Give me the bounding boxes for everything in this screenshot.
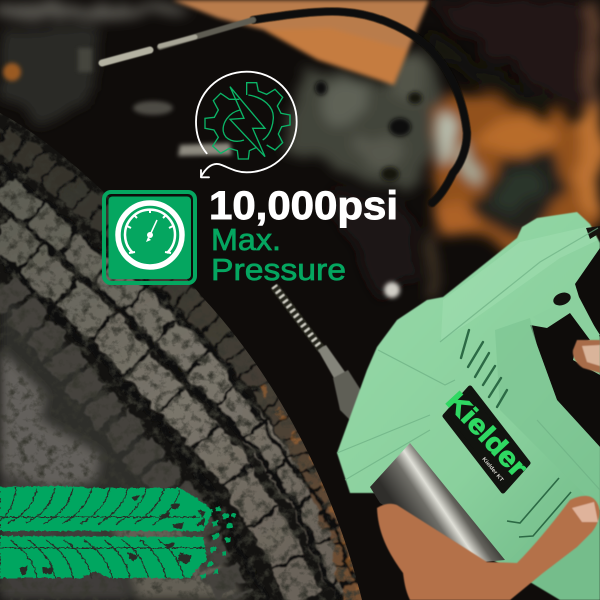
white paint patches (437, 118, 455, 162)
tyre (0, 100, 380, 600)
subheading: Max. Pressure: Pressure (211, 252, 346, 287)
speech circle with arrow (196, 72, 297, 177)
dark beam behind cable (421, 27, 555, 125)
dark gap above trigger (575, 248, 600, 337)
brand label: Kielder KT (480, 456, 505, 484)
pressure badge (104, 192, 195, 283)
body creases (337, 228, 600, 490)
subheading: Max. Pressure: Max. (211, 222, 281, 257)
lower grooves (507, 478, 571, 537)
tyre track graphic (0, 486, 236, 579)
canister (370, 443, 505, 562)
tread ribs (0, 100, 380, 600)
icon: gear and lightning bolt in speech circle (196, 72, 297, 177)
hands (377, 340, 600, 600)
hose spring and fitting (274, 286, 362, 420)
cable (102, 12, 467, 203)
rust plate (432, 93, 600, 253)
top edge highlight (441, 226, 598, 340)
headline: 10,000psi: 10,000psi (209, 184, 398, 228)
handle window (530, 313, 600, 447)
scattered flecks (215, 506, 221, 512)
gear outlines (205, 83, 290, 159)
lower bracket (330, 190, 420, 300)
icon: pressure gauge (118, 203, 182, 267)
groove lines between ribs (0, 205, 337, 600)
inner handle panel (495, 318, 600, 510)
rubber texture (0, 100, 380, 600)
brand label: Kielder (440, 386, 534, 483)
trigger and hole (533, 296, 600, 339)
grey metal (283, 47, 444, 193)
grease gun body (337, 212, 600, 600)
blurred sidewall (0, 290, 245, 600)
vents (461, 330, 507, 407)
